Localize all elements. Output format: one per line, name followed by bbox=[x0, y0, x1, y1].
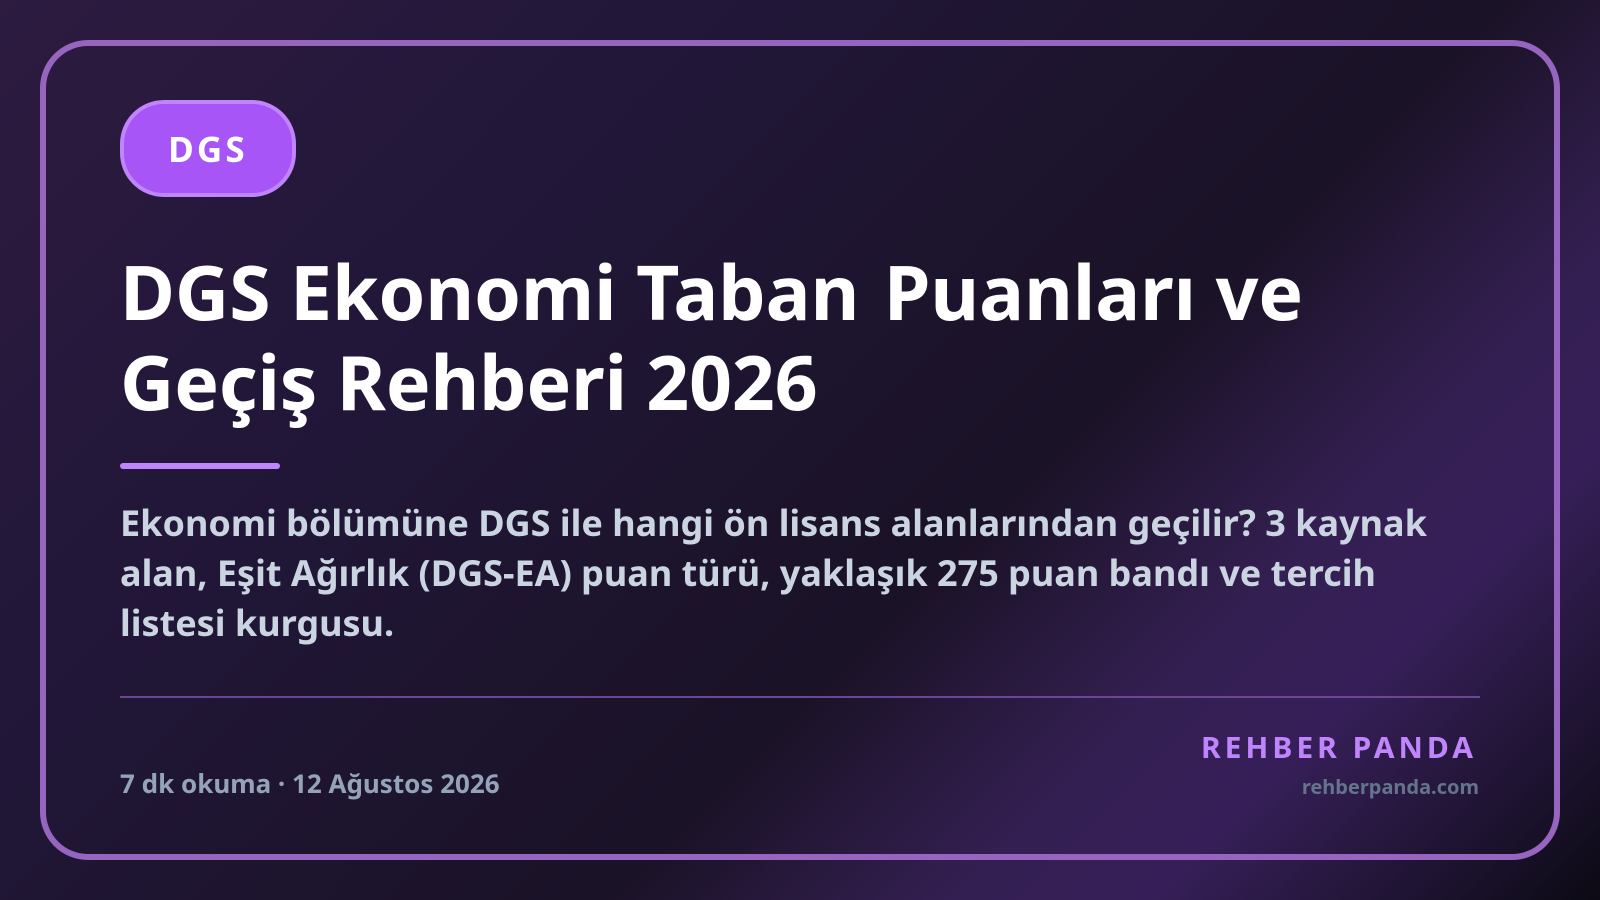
description: listesi kurgusu. bbox=[120, 598, 394, 647]
reading time and date: 7 dk okuma · 12 Ağustos 2026 bbox=[120, 765, 500, 801]
website: rehberpanda.com bbox=[1302, 773, 1479, 800]
description: alan, Eşit Ağırlık (DGS-EA) puan türü, yaklaşık 275 puan bandı ve tercih bbox=[120, 548, 1376, 597]
accent rule bbox=[120, 463, 280, 469]
divider bbox=[120, 696, 1480, 698]
brand name: REHBER PANDA bbox=[1201, 726, 1477, 767]
title bbox=[120, 240, 1303, 432]
category badge: DGS bbox=[168, 126, 248, 173]
description bbox=[120, 498, 1427, 647]
title: DGS Ekonomi Taban Puanları ve bbox=[120, 240, 1303, 342]
category badge bbox=[120, 100, 296, 197]
title: Geçiş Rehberi 2026 bbox=[120, 330, 818, 432]
description: Ekonomi bölümüne DGS ile hangi ön lisans alanlarından geçilir? 3 kaynak bbox=[120, 498, 1427, 547]
